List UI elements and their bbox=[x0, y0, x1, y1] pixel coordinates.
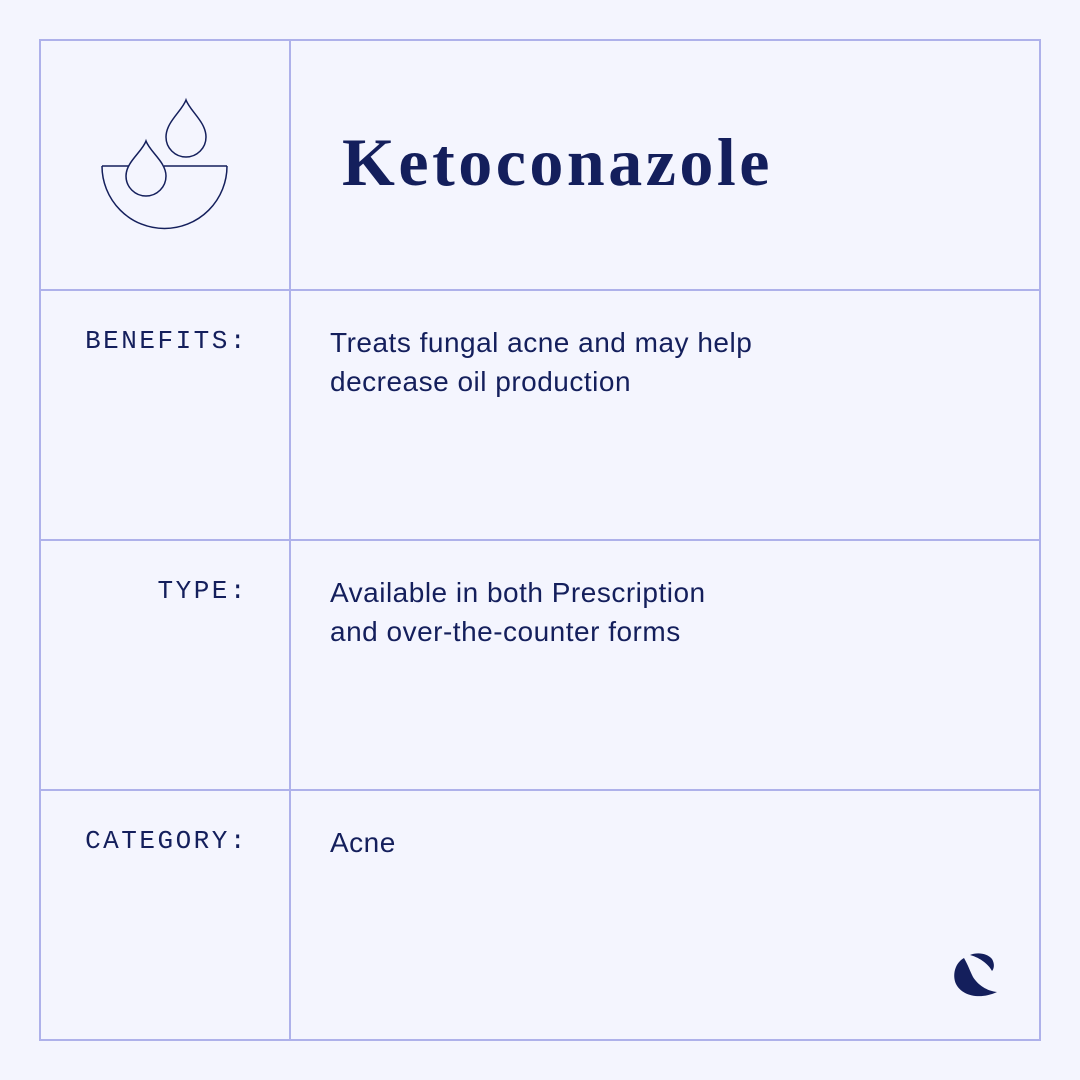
text: benefits: decrease oil production bbox=[330, 366, 631, 397]
text: type: Available in both Prescription bbox=[330, 577, 706, 608]
icon: drops over bowl bbox=[101, 98, 228, 230]
text: benefits bbox=[330, 327, 752, 397]
text: type bbox=[330, 577, 706, 647]
text: benefits: Treats fungal acne and may help bbox=[330, 327, 752, 358]
label: type: TYPE: bbox=[157, 576, 248, 606]
text: type: and over-the-counter forms bbox=[330, 616, 681, 647]
label: category: CATEGORY: bbox=[85, 826, 248, 856]
text: category: Acne bbox=[330, 827, 396, 858]
label: benefits: BENEFITS: bbox=[85, 326, 248, 356]
title: Ketoconazole bbox=[342, 124, 773, 200]
logo bbox=[954, 953, 997, 996]
